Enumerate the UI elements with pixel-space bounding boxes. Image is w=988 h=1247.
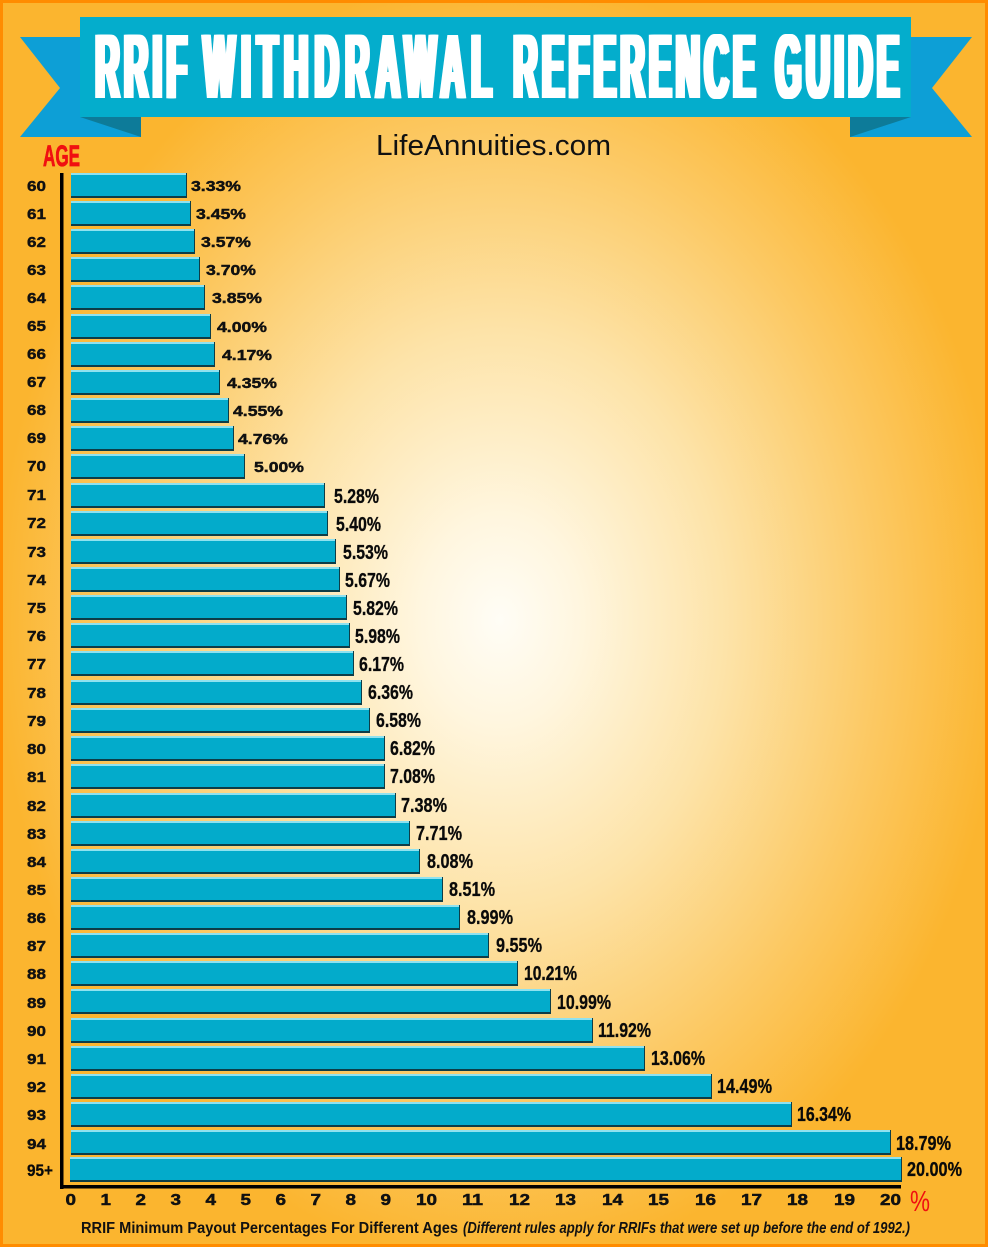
- row: age 78: 6.36%: [368, 682, 413, 704]
- row: age 77: 6.17%: [359, 654, 404, 676]
- row: age 90: 11.92%: [598, 1020, 651, 1042]
- row: age 60: [27, 173, 241, 198]
- row: age 76: [27, 623, 400, 648]
- ribbon main band: [80, 17, 911, 117]
- x axis tick labels: 0: [66, 1192, 76, 1209]
- x axis tick labels: 16: [695, 1192, 716, 1209]
- row: age 61: [27, 201, 246, 226]
- title: GUIDE: [773, 16, 901, 118]
- row: age 80: 80: [27, 742, 46, 758]
- row: age 81: [27, 764, 435, 789]
- row: age 93: 93: [27, 1108, 46, 1124]
- x axis tick labels: 7: [310, 1192, 321, 1209]
- row: age 70: 5.00%: [254, 460, 304, 476]
- row: age 82: [27, 793, 447, 818]
- footer caption: [81, 1220, 910, 1237]
- row: age 83: 7.71%: [416, 823, 462, 845]
- row: age 79: [27, 708, 421, 733]
- row: age 82: 7.38%: [401, 795, 447, 817]
- ribbon left fold: [80, 117, 141, 137]
- row: age 92: 92: [27, 1080, 46, 1096]
- x axis tick labels: 2: [136, 1192, 146, 1209]
- row: age 84: 8.08%: [427, 851, 473, 873]
- row: age 64: 64: [27, 291, 46, 307]
- row: age 76: 5.98%: [355, 626, 400, 648]
- ribbon right tail: [850, 37, 972, 137]
- x axis tick labels: 19: [834, 1192, 855, 1209]
- row: age 94: 18.79%: [896, 1133, 951, 1155]
- percent axis title: %: [910, 1186, 930, 1218]
- row: age 67: 4.35%: [227, 376, 277, 392]
- x axis tick labels: 1: [100, 1192, 111, 1209]
- row: age 90: [27, 1018, 651, 1043]
- row: age 62: 3.57%: [201, 235, 251, 251]
- row: age 68: [27, 398, 283, 423]
- row: age 76: 76: [27, 629, 46, 645]
- row: age 79: 6.58%: [376, 710, 421, 732]
- row: age 73: [27, 539, 388, 564]
- x axis tick labels: 12: [509, 1192, 530, 1209]
- row: age 88: 88: [27, 967, 46, 983]
- x axis tick labels: 17: [741, 1192, 762, 1209]
- row: age 85: 85: [27, 883, 46, 899]
- row: age 83: [27, 821, 462, 846]
- row: age 80: [27, 736, 435, 761]
- row: age 69: 69: [27, 431, 46, 447]
- row: age 68: 68: [27, 403, 46, 419]
- row: age 65: 4.00%: [217, 320, 267, 336]
- row: age 72: [27, 511, 381, 536]
- row: age 95+: 20.00%: [907, 1159, 962, 1181]
- row: age 68: 4.55%: [233, 404, 283, 420]
- title: [92, 16, 901, 118]
- x axis tick labels: 18: [787, 1192, 808, 1209]
- row: age 67: [27, 370, 277, 395]
- row: age 85: [27, 877, 495, 902]
- row: age 66: 4.17%: [222, 348, 272, 364]
- row: age 87: 9.55%: [496, 935, 542, 957]
- row: age 63: 3.70%: [206, 263, 256, 279]
- row: age 86: [27, 905, 513, 930]
- x axis tick labels: 14: [602, 1192, 623, 1209]
- row: age 83: 83: [27, 827, 46, 843]
- row: age 67: 67: [27, 375, 46, 391]
- row: age 86: 86: [27, 911, 46, 927]
- website name: LifeAnnuities.com: [376, 130, 611, 162]
- row: age 64: 3.85%: [212, 291, 262, 307]
- row: age 71: [27, 483, 379, 508]
- row: age 75: [27, 595, 398, 620]
- row: age 77: 77: [27, 657, 46, 673]
- row: age 65: 65: [27, 319, 46, 335]
- x axis tick labels: 20: [880, 1192, 901, 1209]
- row: age 69: 4.76%: [238, 432, 288, 448]
- x axis tick labels: 15: [648, 1192, 669, 1209]
- x axis tick labels: 13: [555, 1192, 576, 1209]
- row: age 61: 3.45%: [196, 207, 246, 223]
- row: age 72: 72: [27, 516, 46, 532]
- row: age 82: 82: [27, 799, 46, 815]
- row: age 74: [27, 567, 390, 592]
- row: age 75: 75: [27, 601, 46, 617]
- row: age 79: 79: [27, 714, 46, 730]
- row: age 72: 5.40%: [336, 514, 381, 536]
- x axis tick labels: 4: [206, 1192, 216, 1209]
- row: age 78: 78: [27, 686, 46, 702]
- row: age 81: 7.08%: [390, 766, 435, 788]
- x axis tick labels: 6: [276, 1192, 286, 1209]
- age axis title: AGE: [43, 140, 80, 173]
- x axis tick labels: 10: [416, 1192, 437, 1209]
- row: age 66: 66: [27, 347, 46, 363]
- chart axes: [60, 173, 901, 1189]
- x axis tick labels: 11: [462, 1192, 483, 1209]
- row: age 92: 14.49%: [717, 1076, 772, 1098]
- row: age 62: 62: [27, 235, 46, 251]
- row: age 66: [27, 342, 272, 367]
- bar chart: [27, 173, 962, 1182]
- ribbon left tail: [20, 37, 141, 137]
- row: age 71: 5.28%: [334, 486, 379, 508]
- row: age 73: 5.53%: [343, 542, 388, 564]
- row: age 91: [27, 1046, 705, 1071]
- row: age 63: 63: [27, 263, 46, 279]
- row: age 87: [27, 933, 542, 958]
- caption main: RRIF Minimum Payout Percentages For Different Ages: [81, 1220, 458, 1237]
- row: age 86: 8.99%: [467, 907, 513, 929]
- row: age 92: [27, 1074, 772, 1099]
- row: age 87: 87: [27, 939, 46, 955]
- row: age 75: 5.82%: [353, 598, 398, 620]
- x axis tick labels: 9: [380, 1192, 391, 1209]
- row: age 60: 3.33%: [191, 179, 241, 195]
- row: age 62: [27, 229, 251, 254]
- row: age 91: 13.06%: [651, 1048, 705, 1070]
- row: age 89: [27, 989, 611, 1014]
- row: age 80: 6.82%: [390, 738, 435, 760]
- row: age 95+: 95+: [27, 1161, 53, 1180]
- row: age 65: [27, 314, 267, 339]
- row: age 84: 84: [27, 855, 46, 871]
- title: RRIF: [92, 16, 188, 118]
- title: REFERENCE: [511, 16, 757, 118]
- row: age 91: 91: [27, 1052, 46, 1068]
- row: age 94: [27, 1130, 951, 1155]
- row: age 93: 16.34%: [797, 1104, 851, 1126]
- ribbon right fold: [850, 117, 911, 137]
- row: age 93: [27, 1102, 851, 1127]
- x axis tick labels: 3: [170, 1192, 181, 1209]
- row: age 81: 81: [27, 770, 46, 786]
- row: age 63: [27, 257, 256, 282]
- row: age 85: 8.51%: [449, 879, 495, 901]
- row: age 89: 89: [27, 996, 46, 1012]
- x axis tick labels: [66, 1192, 901, 1209]
- row: age 70: 70: [27, 459, 46, 475]
- row: age 64: [27, 285, 262, 310]
- row: age 94: 94: [27, 1137, 46, 1153]
- row: age 60: 60: [27, 179, 46, 195]
- row: age 70: [27, 454, 304, 479]
- x axis tick labels: 5: [240, 1192, 251, 1209]
- row: age 84: [27, 849, 473, 874]
- row: age 69: [27, 426, 288, 451]
- title ribbon: [20, 17, 972, 137]
- row: age 73: 73: [27, 545, 46, 561]
- row: age 71: 71: [27, 488, 46, 504]
- row: age 95+: [27, 1157, 962, 1182]
- row: age 90: 90: [27, 1024, 46, 1040]
- row: age 88: 10.21%: [524, 963, 577, 985]
- row: age 89: 10.99%: [557, 992, 611, 1014]
- title: WITHDRAWAL: [201, 16, 496, 118]
- x axis tick labels: 8: [346, 1192, 356, 1209]
- row: age 74: 74: [27, 573, 46, 589]
- row: age 78: [27, 680, 413, 705]
- row: age 88: [27, 961, 577, 986]
- row: age 77: [27, 651, 404, 676]
- row: age 74: 5.67%: [345, 570, 390, 592]
- row: age 61: 61: [27, 207, 46, 223]
